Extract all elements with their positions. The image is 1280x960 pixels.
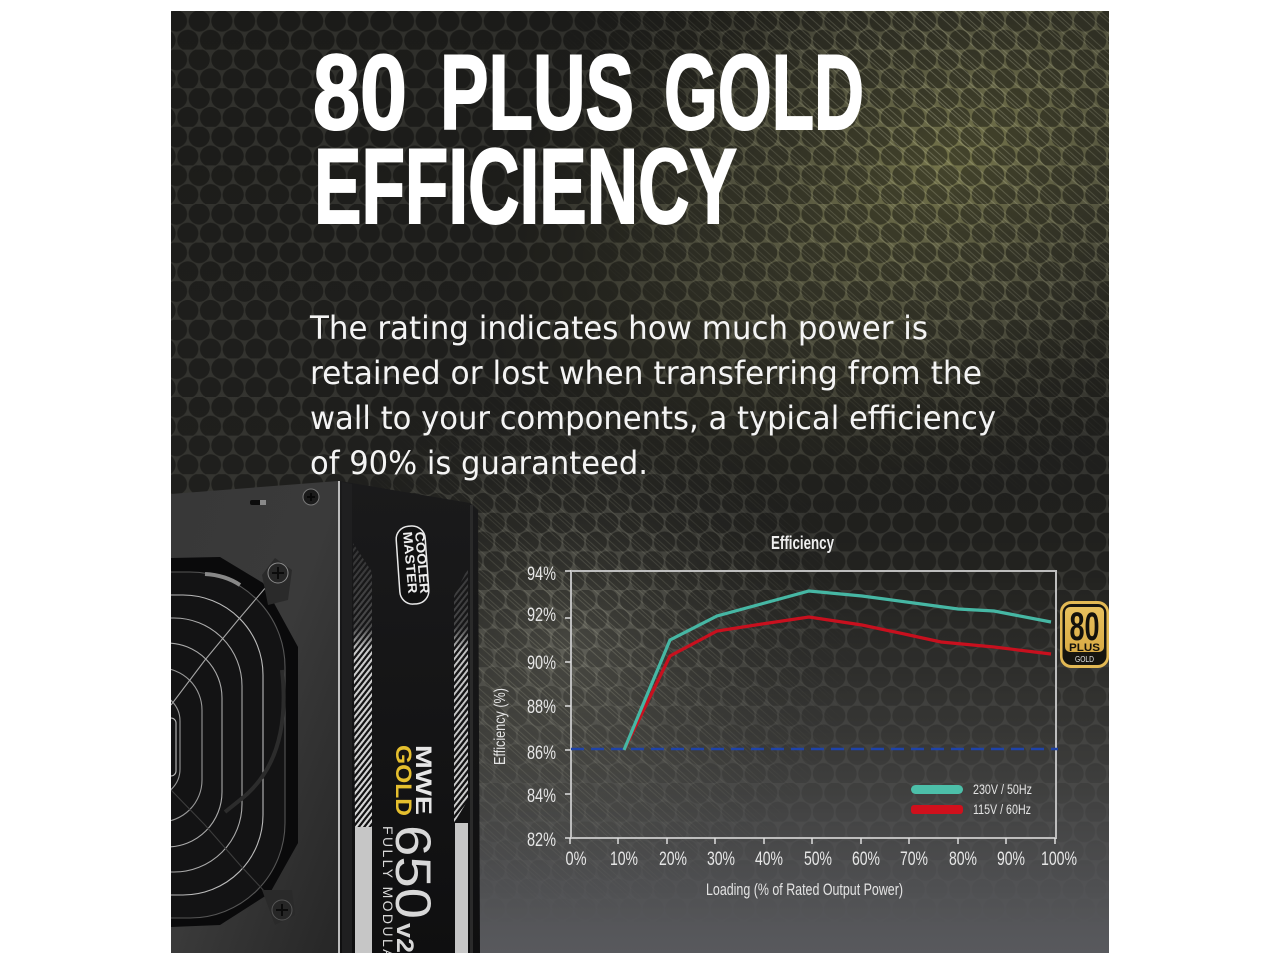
x-axis labels: [566, 849, 1077, 870]
product label: v2: [391, 923, 418, 953]
y-axis labels: 86%: [527, 743, 556, 764]
y-axis labels: [527, 564, 556, 851]
body text: wall to your components, a typical efficiency: [310, 399, 996, 437]
legend: [911, 781, 1032, 817]
x-axis labels: 40%: [755, 849, 783, 870]
86% dashed reference line: [571, 748, 1058, 750]
slot: [250, 500, 260, 505]
y-axis labels: 94%: [527, 564, 556, 585]
series: 230V / 50Hz: [624, 591, 1051, 750]
badge: 80 PLUS Gold: [1060, 601, 1109, 668]
psu side face: [340, 481, 480, 953]
x-axis labels: 20%: [659, 849, 687, 870]
chart: efficiency curves: [492, 533, 1077, 899]
x-axis labels: 80%: [949, 849, 977, 870]
badge: 80 PLUS Gold: 80: [1070, 605, 1100, 649]
axis ticks: [565, 571, 1055, 844]
x-axis labels: 70%: [900, 849, 928, 870]
product: power supply unit: [171, 481, 480, 953]
series: 115V / 60Hz: [624, 617, 1051, 750]
title: GOLD: [664, 32, 864, 152]
logo: Cooler Master: COOLER: [412, 531, 432, 595]
product label: [383, 746, 432, 953]
fan shroud: [171, 557, 298, 927]
y-axis labels: 84%: [527, 786, 556, 807]
plot frame: [571, 571, 1056, 838]
y-axis labels: 82%: [527, 830, 556, 851]
product label: 650: [385, 825, 441, 919]
title: EFFICIENCY: [314, 126, 737, 246]
y-axis labels: 88%: [527, 697, 556, 718]
body text: of 90% is guaranteed.: [310, 444, 648, 482]
x-axis labels: 0%: [566, 849, 587, 870]
panel: textured background: [171, 11, 1109, 953]
psu left face: [171, 481, 340, 953]
title: PLUS: [440, 32, 634, 152]
body text: retained or lost when transferring from the: [310, 354, 982, 392]
y-axis title: Efficiency (%): [492, 688, 509, 765]
x-axis labels: 30%: [707, 849, 735, 870]
legend: 115V / 60Hz: [973, 801, 1031, 817]
y-axis labels: 90%: [527, 653, 556, 674]
legend: 230V / 50Hz: [973, 781, 1032, 797]
chart title: Efficiency: [771, 533, 834, 553]
x-axis title: Loading (% of Rated Output Power): [706, 880, 903, 899]
x-axis labels: 90%: [997, 849, 1025, 870]
x-axis labels: 10%: [610, 849, 638, 870]
title: [313, 32, 864, 246]
y-axis labels: 92%: [527, 605, 556, 626]
body text: [309, 309, 996, 482]
side stripes: [353, 543, 468, 953]
logo: Cooler Master: MASTER: [400, 531, 420, 595]
logo: Cooler Master: [395, 525, 432, 605]
product label: GOLD: [391, 745, 416, 816]
badge: 80 PLUS Gold: GOLD: [1075, 655, 1094, 664]
body text: The rating indicates how much power is: [309, 309, 928, 347]
screws: [262, 489, 319, 925]
title: 80: [313, 32, 407, 152]
badge: 80 PLUS Gold: PLUS: [1069, 642, 1100, 654]
x-axis labels: 50%: [804, 849, 832, 870]
x-axis labels: 100%: [1041, 849, 1077, 870]
product label: MWE: [411, 745, 436, 815]
x-axis labels: 60%: [852, 849, 880, 870]
